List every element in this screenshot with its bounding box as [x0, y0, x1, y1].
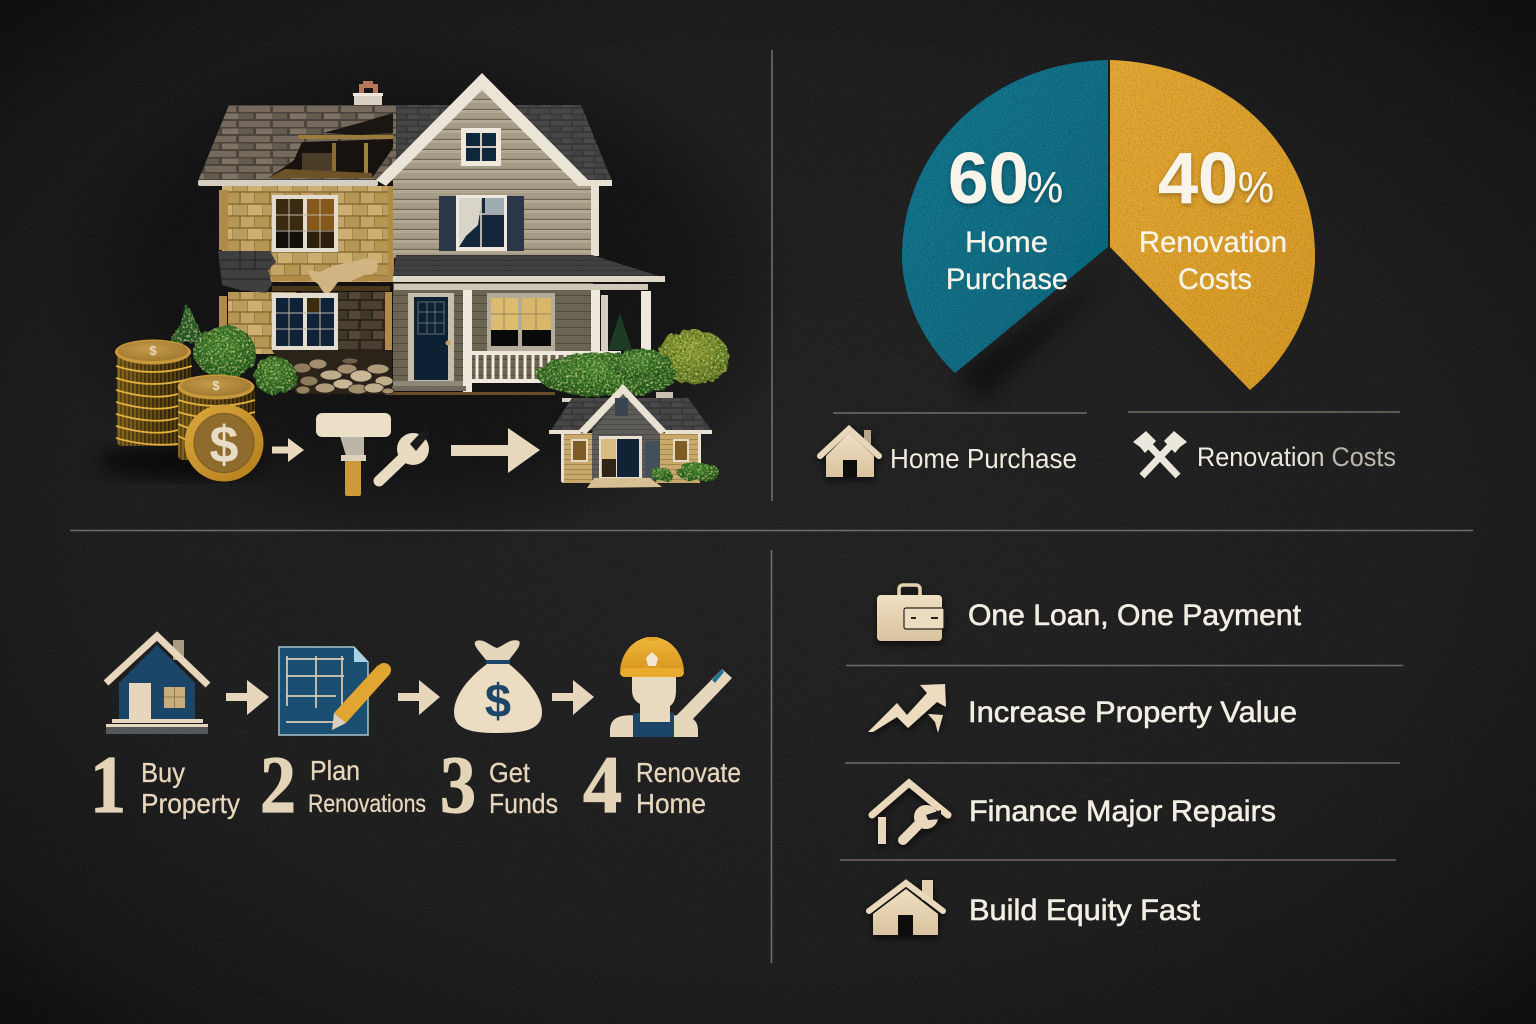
- legend text: renovation costs: Renovation Costs: [1197, 442, 1396, 472]
- label: Renovation Costs: [1139, 226, 1287, 296]
- right gable trim: [376, 73, 588, 186]
- label: 60%: %: [1027, 163, 1063, 212]
- step 3 icon: money bag: [454, 640, 542, 733]
- porch beam: [393, 276, 665, 290]
- step 4 icon: worker: [610, 637, 732, 737]
- shrubs right: [537, 330, 729, 397]
- exposed timber frame: [219, 186, 394, 380]
- eaves: [198, 180, 378, 186]
- benefit text: major repairs: Finance Major Repairs: [969, 795, 1276, 828]
- legend text: home purchase: Home Purchase: [890, 443, 1077, 474]
- step 3 label: Funds: [489, 788, 558, 819]
- pie slice: home purchase 60%: [902, 60, 1108, 373]
- right roof: [392, 105, 612, 181]
- lower right wall: [393, 283, 593, 383]
- divider: vertical bottom: [770, 550, 772, 963]
- shrubs left: [170, 305, 296, 395]
- step 4 label: [583, 739, 741, 830]
- coin stack back: [115, 340, 192, 446]
- damaged left roof: [198, 105, 396, 181]
- step 4 label: Home: [636, 788, 706, 819]
- right upper siding: [393, 87, 592, 258]
- torn paper insulation: [307, 258, 378, 296]
- step 4 label: Renovate: [636, 757, 741, 788]
- large dollar coin: [184, 404, 264, 482]
- icon: small finished house: [549, 384, 719, 488]
- step 1 label: 1: [90, 739, 126, 830]
- label: Home Purchase: [946, 226, 1068, 296]
- step 2 label: Renovations: [308, 790, 426, 818]
- step 2 label: [260, 739, 426, 830]
- label: 40%: [1158, 139, 1274, 219]
- divider: vertical top: [771, 50, 773, 501]
- icon: crossed hammers: [1133, 431, 1187, 476]
- step 3 icon: money bag: $: [485, 674, 511, 727]
- left lower wall: [228, 292, 296, 354]
- step 1 label: [90, 739, 240, 830]
- step 2 label: Plan: [310, 755, 360, 786]
- step 1 label: Property: [141, 788, 240, 819]
- roof hole: [268, 113, 393, 178]
- icon: wrench: [379, 429, 430, 481]
- pie slice: renovation costs 40%: [1110, 60, 1315, 390]
- arrow 3: [552, 680, 594, 715]
- benefit text: one loan: One Loan, One Payment: [968, 599, 1302, 632]
- porch steps: [385, 381, 555, 395]
- label: Home Purchase: Purchase: [946, 263, 1068, 296]
- panel: benefits list: [840, 585, 1403, 935]
- pie shadow: [955, 262, 1262, 400]
- porch railing: [471, 351, 621, 383]
- large dollar coin: $: [210, 416, 239, 474]
- icon: large house half damaged half renovated: [198, 73, 665, 395]
- step 3 label: [440, 739, 558, 830]
- step 3 label: Get: [489, 757, 530, 788]
- porch window: [487, 293, 555, 351]
- step 1 label: Buy: [141, 757, 185, 788]
- benefit text: property value: Increase Property Value: [968, 696, 1297, 729]
- lower left window: [272, 293, 338, 350]
- arrow 1: [226, 680, 269, 715]
- icon: hammer: [316, 413, 391, 496]
- arrow: coins to tools: [272, 438, 304, 462]
- label: 60%: [948, 139, 1063, 219]
- torn shingles: [218, 251, 276, 293]
- label: 40%: 40: [1158, 139, 1238, 219]
- shuttered window: [439, 195, 524, 251]
- coin stack front: [178, 374, 255, 460]
- icon: house with wrench: [872, 783, 948, 844]
- dark exposed wall: [296, 292, 390, 354]
- step 4 label: 4: [583, 739, 622, 830]
- step 1 icon: house: [106, 636, 208, 734]
- front door: [408, 293, 454, 381]
- attic window: [461, 128, 501, 166]
- small background tree: [608, 313, 632, 350]
- step 3 label: 3: [440, 739, 476, 830]
- divider: horizontal centre: [70, 530, 1473, 532]
- arrow 2: [398, 680, 440, 715]
- coin stack front: $: [212, 378, 220, 393]
- porch columns: [463, 290, 651, 392]
- label: 40%: %: [1238, 163, 1274, 212]
- label: 60%: 60: [948, 139, 1029, 219]
- icon: home: [869, 880, 943, 935]
- benefit text: build equity: Build Equity Fast: [969, 894, 1201, 927]
- porch roof: [393, 255, 662, 277]
- icon: coin stacks: [95, 340, 265, 482]
- label: Renovation Costs: Costs: [1178, 263, 1252, 296]
- panel: renovation house illustration: [95, 73, 729, 496]
- panel: chart legend: [820, 412, 1400, 477]
- step 2 icon: blueprint and pencil: [279, 647, 391, 735]
- arrow: tools to finished home: [451, 428, 540, 473]
- left damaged upper wall: [222, 186, 393, 282]
- right eave and corner: [578, 180, 612, 256]
- step 2 label: 2: [260, 739, 296, 830]
- coin stack back: $: [149, 343, 157, 358]
- upper left window: [272, 195, 338, 252]
- label: Home Purchase: Home: [965, 226, 1048, 259]
- label: Renovation Costs: Renovation: [1139, 226, 1287, 259]
- panel: four step process: [90, 636, 741, 830]
- icon: rising chart arrow: [868, 684, 946, 733]
- chimney: [353, 81, 383, 105]
- icon: briefcase and wallet: [877, 585, 944, 641]
- icon: legend house: [820, 429, 879, 477]
- panel: pie chart 60/40: [902, 60, 1315, 400]
- stone rubble: [272, 350, 394, 394]
